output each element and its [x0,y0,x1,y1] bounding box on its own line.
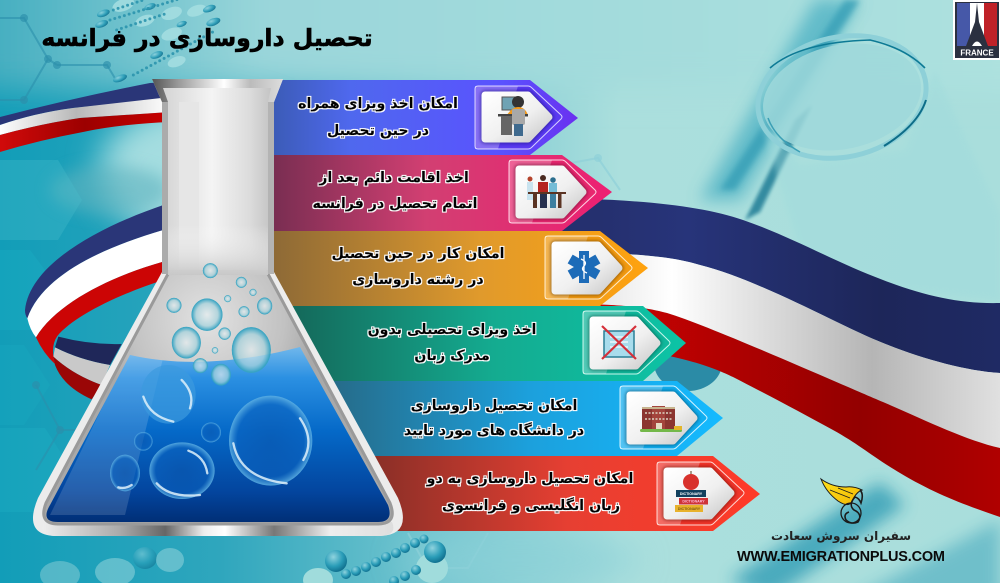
banner text: امکان کار در حین تحصیل [331,246,505,262]
banner text: در حین تحصیل [327,123,429,139]
banner text: امکان تحصیل داروسازی [411,398,577,414]
banner text [331,246,505,288]
banner text [368,322,536,364]
icon: person at desk [475,86,562,149]
France badge with Eiffel tower [953,0,1000,60]
banner text: اخذ اقامت دائم بعد از [318,170,469,186]
banner text: اخذ ویزای تحصیلی بدون [368,322,536,338]
flask [30,79,410,536]
ribbon: upper left band [0,82,170,152]
banner shape [270,80,578,155]
flask inner grey body [44,260,392,524]
ribbon: right French tricolor band [530,198,1000,517]
flask liquid [46,347,390,522]
ribbon: lower left loop [25,205,163,399]
icon: university building [620,386,707,449]
flask neck [162,88,274,275]
bubbles above and at liquid surface [167,263,272,385]
banner text [404,398,584,439]
molecule beads, bottom [40,534,448,583]
logo mark: winged swan [821,479,862,523]
banner 3: work while studying [270,231,648,306]
banner shape [270,231,648,306]
website address: WWW.EMIGRATIONPLUS.COM [737,549,945,565]
banner 2: permanent residence [270,155,612,231]
title: تحصیل داروسازی در فرانسه [41,24,373,52]
flask bottom metal rim [43,522,393,536]
banner 5: approved universities [270,381,723,456]
banner text: امکان اخذ ویزای همراه [298,96,458,112]
banner text [298,96,458,139]
flask neck lip [152,79,283,102]
banner shape [270,381,723,456]
molecule chain decoration, top [94,0,221,84]
banner text: امکان تحصیل داروسازی به دو [426,471,633,487]
banner text: در رشته داروسازی [352,272,484,288]
logo wordmark: سفیران سروش سعادت [771,529,911,544]
banner shape [270,306,686,381]
icon: apple on dictionaries: DICTIONARY [678,507,701,511]
flask outer glass rim [33,79,403,536]
icon: star of life [545,236,632,299]
banner text [312,170,478,212]
bubbles inside liquid [110,365,312,499]
icon: apple on dictionaries: DICTIONARY [680,492,703,496]
banner 4: visa without language certificate [270,306,686,381]
banner 6: two languages [270,456,760,531]
logo: Safiran Soroush Saadat [737,479,945,565]
banner text: اتمام تحصیل در فرانسه [312,196,478,212]
test tube [746,21,1000,300]
icon: apple on dictionaries: DICTIONARY [682,500,705,504]
banner text: مدرک زبان [414,348,490,364]
France badge with Eiffel tower: FRANCE [960,48,994,58]
banner text [426,471,633,514]
banner shape [270,456,760,531]
icon: lab team at table [509,160,596,223]
banner shape [270,155,612,231]
icon: crossed-out certificate [583,311,670,374]
banner text: در دانشگاه های مورد تایید [404,422,584,439]
banner 1: student visa [270,80,578,155]
icon: apple on dictionaries [657,462,744,525]
banner text: زبان انگلیسی و فرانسوی [442,497,620,514]
